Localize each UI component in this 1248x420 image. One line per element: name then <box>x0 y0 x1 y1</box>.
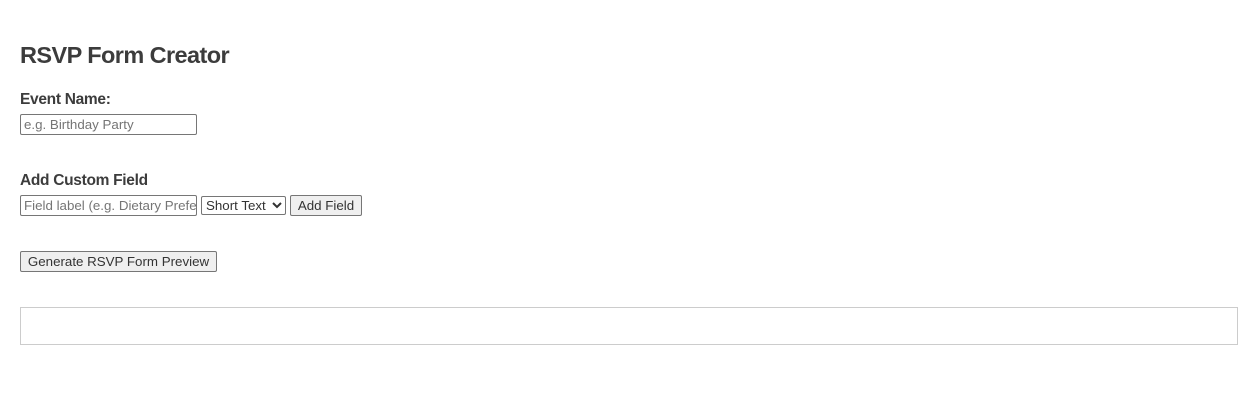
panel: preview output <box>20 307 1238 345</box>
button: add field: Add Field <box>298 198 354 213</box>
label: add custom field: Add Custom Field <box>20 172 148 189</box>
button: add field <box>290 195 362 216</box>
input: event name <box>20 114 197 135</box>
title: RSVP Form Creator <box>20 42 229 68</box>
label: event name: Event Name: <box>20 91 111 108</box>
button: generate preview: Generate RSVP Form Preview <box>28 254 209 269</box>
input: event name: e.g. Birthday Party <box>24 117 134 132</box>
input: field label <box>20 195 197 216</box>
button: generate preview <box>20 251 217 272</box>
input: field label: Field label (e.g. Dietary Prefe <box>24 198 197 213</box>
select: field type: Short Text <box>206 198 266 213</box>
select: field type <box>201 196 286 215</box>
